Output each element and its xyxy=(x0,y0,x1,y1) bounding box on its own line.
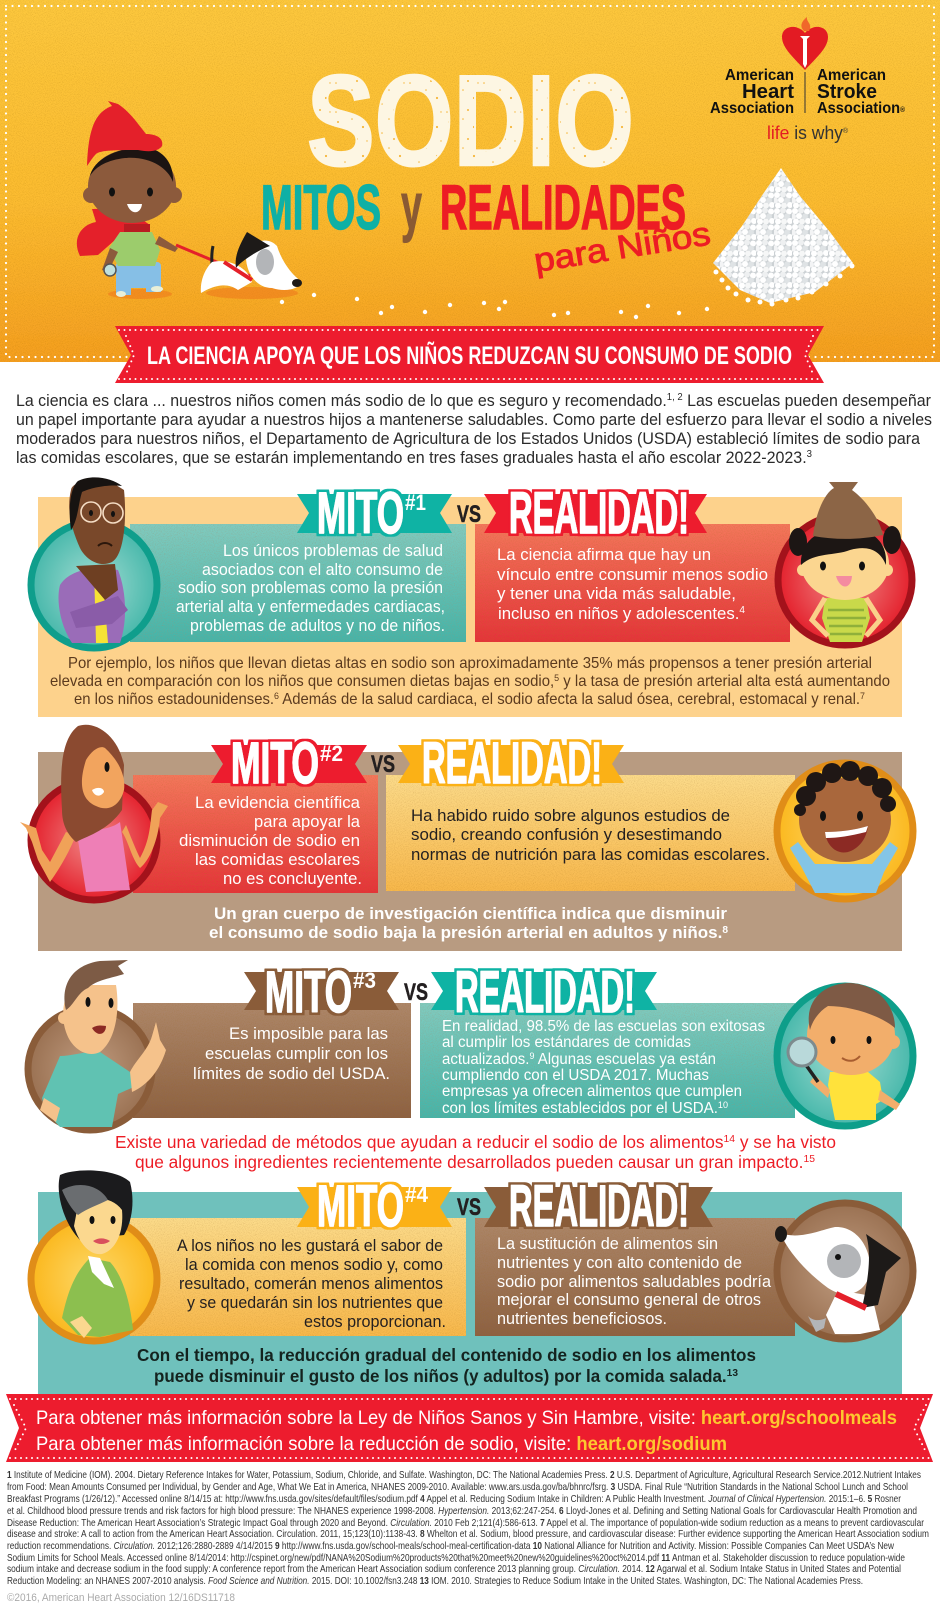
red statement text: que algunos ingredientes recientemente desarrollados pueden causar un gran impacto. xyxy=(135,1152,812,1172)
explanation text: 5 xyxy=(554,673,559,684)
character: girl with detective hat xyxy=(778,482,912,645)
dog xyxy=(201,232,302,293)
vs: VS xyxy=(457,1194,481,1221)
reality 1 text: La ciencia afirma que hay un xyxy=(497,545,711,564)
conclusion text: el consumo de sodio baja la presión arterial en adultos y niños. xyxy=(209,924,707,942)
intro text: 3 xyxy=(807,449,812,460)
reality 3 text xyxy=(442,1018,765,1117)
subtitle: Mitos y Realidades para Niños: para Niños xyxy=(531,215,713,279)
myth 2 text: las comidas escolares xyxy=(195,850,360,869)
salt pile xyxy=(713,168,854,306)
intro text: Las escuelas pueden desempeñar xyxy=(683,391,931,410)
myth 2 text: para apoyar la xyxy=(254,812,361,831)
logo: American Heart / Stroke Association: Stroke xyxy=(817,81,877,103)
reality 1 text: y tener una vida más saludable, xyxy=(497,584,736,603)
character: boy with magnifying glass xyxy=(777,983,913,1126)
reality 4 text: nutrientes beneficiosos. xyxy=(497,1309,667,1328)
logo: American Heart / Stroke Association: Association xyxy=(710,100,794,117)
reality 4 text xyxy=(497,1234,772,1328)
reality ribbon xyxy=(398,731,624,796)
myth 2 ribbon: MITO xyxy=(231,731,319,796)
logo: American Heart / Stroke Association: Heart xyxy=(742,81,794,103)
character: woman in green jacket xyxy=(31,1170,157,1341)
reality 1 text: 4 xyxy=(739,605,745,616)
reality 2 text: Ha habido ruido sobre algunos estudios de xyxy=(411,806,730,825)
boy cape xyxy=(77,208,150,256)
myth 3 text: escuelas cumplir con los xyxy=(205,1044,388,1063)
reality ribbon: REALIDAD! xyxy=(509,1174,689,1239)
myth 2 text: La evidencia científica xyxy=(195,793,361,812)
subtitle: Mitos y Realidades para Niños: MITOS xyxy=(261,173,381,243)
reality 4 text: sodio por alimentos saludables podría xyxy=(497,1272,772,1291)
myth 1 ribbon: MITO xyxy=(317,481,404,546)
myth 4 ribbon: MITO xyxy=(317,1174,404,1239)
myth 4 text: resultado, comerán menos alimentos xyxy=(179,1274,443,1293)
subtitle: Mitos y Realidades para Niños: y xyxy=(401,169,422,243)
conclusion text: Un gran cuerpo de investigación científica indica que disminuir xyxy=(214,905,728,923)
myth 1 text: Los únicos problemas de salud xyxy=(223,541,443,560)
reality 3 text: 10 xyxy=(718,1100,728,1110)
logo: American Heart / Stroke Association xyxy=(710,17,906,143)
myth 1 text: asociados con el alto consumo de xyxy=(202,560,443,579)
subtitle: Mitos y Realidades para Niños xyxy=(261,169,713,279)
panel: myth 3 vs reality xyxy=(28,960,913,1172)
explanation text: Por ejemplo, los niños que llevan dietas altas en sodio son aproximadamente 35% más propensos a tener presión arterial xyxy=(68,655,872,672)
reality 3 text: 9 xyxy=(529,1051,534,1061)
myth 1 text: sodio son problemas como la presión xyxy=(178,578,443,597)
red statement text: y se ha visto xyxy=(735,1132,836,1152)
references xyxy=(7,1469,929,1587)
reality 1 text xyxy=(497,545,768,623)
panel: myth 4 vs reality xyxy=(31,1170,913,1394)
illustration: boy detective walking dog xyxy=(77,101,302,299)
myth 4 text: y se quedarán sin los nutrientes que xyxy=(187,1293,443,1312)
title: SODIO: SODIO xyxy=(307,49,634,193)
reality 3 text: Algunas escuelas ya están xyxy=(534,1051,716,1068)
logo: American Heart / Stroke Association: ® xyxy=(900,106,906,114)
conclusion text xyxy=(209,905,729,942)
footer banner: more information xyxy=(6,1394,933,1462)
myth 2 ribbon: #2 xyxy=(320,741,343,766)
reality 2 text: sodio, creando confusión y desestimando xyxy=(411,825,722,844)
logo: American Heart / Stroke Association: life is why xyxy=(767,123,844,143)
explanation text: 7 xyxy=(860,691,865,702)
myth 1 text xyxy=(176,541,445,635)
reality 4 text: nutrientes y con alto contenido de xyxy=(497,1253,742,1272)
subtitle: Mitos y Realidades para Niños: REALIDADES xyxy=(440,173,686,243)
red statement text: 14 xyxy=(724,1133,735,1145)
reality 1 text: vínculo entre consumir menos sodio xyxy=(497,565,768,584)
myth 4 text: la comida con menos sodio y, como xyxy=(185,1255,443,1274)
red statement text xyxy=(115,1132,836,1172)
salt trail xyxy=(280,293,709,319)
character: woman with long hair xyxy=(20,725,168,900)
reality ribbon: REALIDAD! xyxy=(509,481,689,546)
reality 3 text: con los límites establecidos por el USDA. xyxy=(442,1100,725,1117)
myth 2 text xyxy=(179,793,362,888)
reality 3 text: empresas ya ofrecen alimentos que cumplen xyxy=(442,1083,742,1100)
myth 3 text: Es imposible para las xyxy=(229,1024,388,1043)
conclusion text: 8 xyxy=(722,925,729,936)
footer banner: more information: Para obtener más información sobre la Ley de Niños Sanos y Sin Hambre, visite: heart.org/schoolmeals xyxy=(36,1407,897,1429)
references: Breakfast Programs (1/26/12).” Accessed online 8/14/15 at: http://www.fns.usda.gov/sites/default/files/sodium.pdf 4 Appel et al. Reducing Sodium Intake in Children: A Public Health Investment. Journal of Clinical Hypertension. 2015:1–6. 5 Rosner xyxy=(7,1493,901,1505)
reality 3 text: cumpliendo con el USDA 2017. Muchas xyxy=(442,1067,709,1084)
conclusion text xyxy=(137,1345,756,1386)
character: happy boy xyxy=(777,761,913,899)
myth 4 text: A los niños no les gustará el sabor de xyxy=(177,1236,443,1255)
myth 3 ribbon: #3 xyxy=(353,968,376,993)
myth 3 ribbon: MITO xyxy=(265,960,352,1025)
copyright: ©2016, American Heart Association 12/16DS11718 xyxy=(7,1592,235,1604)
reality ribbon xyxy=(484,1174,713,1239)
conclusion text: 13 xyxy=(727,1367,738,1379)
reality 2 text xyxy=(411,806,770,864)
explanation text: en los niños estadounidenses. xyxy=(74,691,289,708)
myth 2 text: no es concluyente. xyxy=(223,869,362,888)
intro text: las comidas escolares, que se estarán implementando en tres fases graduales hasta el año escolar 2022-2023. xyxy=(16,448,855,467)
vs: VS xyxy=(404,979,428,1006)
boy body xyxy=(102,224,178,297)
myth 1 text: arterial alta y enfermedades cardiacas, xyxy=(176,597,445,616)
myth 4 ribbon: #4 xyxy=(405,1182,429,1207)
explanation text xyxy=(50,655,890,708)
dog leash xyxy=(176,245,250,276)
vs: VS xyxy=(371,751,395,778)
reality ribbon: REALIDAD! xyxy=(422,731,602,796)
intro text: La ciencia es clara ... nuestros niños comen más sodio de lo que es seguro y recomendado. xyxy=(16,391,710,410)
header background xyxy=(0,0,940,362)
explanation text: 6 xyxy=(274,691,279,702)
logo: American Heart / Stroke Association: ® xyxy=(843,127,849,135)
explanation text: Además de la salud cardiaca, el sodio afecta la salud ósea, cerebral, estomacal y renal. xyxy=(279,691,860,708)
reality ribbon xyxy=(484,481,707,546)
explanation text: elevada en comparación con los niños que consumen dietas bajas en sodio, xyxy=(50,673,591,690)
red statement text: Existe una variedad de métodos que ayudan a reducir el sodio de los alimentos xyxy=(115,1132,731,1152)
reality 4 text: mejorar el consumo general de otros xyxy=(497,1290,761,1309)
myth 3 text: límites de sodio del USDA. xyxy=(193,1064,390,1083)
myth 4 text xyxy=(177,1236,446,1331)
myth 1 ribbon: #1 xyxy=(405,490,426,515)
character: dog xyxy=(775,1203,913,1339)
myth 2 text: disminución de sodio en xyxy=(179,831,360,850)
conclusion text: puede disminuir el gusto de los niños (y adultos) por la comida salada. xyxy=(154,1366,744,1386)
reality 2 text: normas de nutrición para las comidas escolares. xyxy=(411,845,770,864)
icon: heart and torch xyxy=(782,17,828,70)
conclusion text: Con el tiempo, la reducción gradual del contenido de sodio en los alimentos xyxy=(137,1345,756,1365)
myth 1 text: problemas de adultos y no de niños. xyxy=(190,616,445,635)
reality ribbon xyxy=(431,960,657,1025)
myth 4 text: estos proporcionan. xyxy=(304,1312,446,1331)
reality 4 text: La sustitución de alimentos sin xyxy=(497,1234,718,1253)
logo: American Heart / Stroke Association: Association xyxy=(817,100,905,117)
panel: myth 2 vs reality xyxy=(20,725,913,951)
reality 3 text: En realidad, 98.5% de las escuelas son exitosas xyxy=(442,1018,765,1035)
explanation text: y la tasa de presión arterial alta está aumentando xyxy=(559,673,890,690)
red statement text: 15 xyxy=(803,1153,815,1165)
boy head and hat xyxy=(83,101,182,223)
reality 3 text: actualizados. xyxy=(442,1051,532,1068)
panel: myth 1 vs reality xyxy=(31,477,912,717)
myth 3 text xyxy=(193,1024,390,1083)
vs: VS xyxy=(457,501,481,528)
footer banner: more information: Para obtener más información sobre la reducción de sodio, visite: heart.org/sodium xyxy=(36,1433,727,1455)
logo: American Heart / Stroke Association: American xyxy=(725,67,794,84)
reality ribbon: REALIDAD! xyxy=(455,960,635,1025)
character: man pointing finger xyxy=(28,960,166,1130)
banner: science supports xyxy=(115,326,824,383)
intro text: 1, 2 xyxy=(667,392,683,403)
reality 1 text: incluso en niños y adolescentes. xyxy=(498,604,743,623)
logo: American Heart / Stroke Association: American xyxy=(817,67,886,84)
intro text xyxy=(16,391,932,467)
reality 3 text: al cumplir los estándares de comidas xyxy=(442,1034,691,1051)
references: sodium intake and decrease sodium in the food supply: A conference report from the American Heart Association sodium conference 2013 planning group. Circulation. 2014. 12 Agarwal et al. Sodium Intake Status in United States and Potential xyxy=(7,1563,901,1575)
character: man with glasses xyxy=(31,477,157,648)
references: Sodium Limits for School Meals. Accessed online 8/14/2014: http://cspinet.org/new/pdf/NANA%20Sodium%20products%20that%20meet%20new%20guidelines%20oct%2014.pdf 11 Antman et al. Stakeholder discussion to reduce population-wide xyxy=(7,1552,905,1564)
